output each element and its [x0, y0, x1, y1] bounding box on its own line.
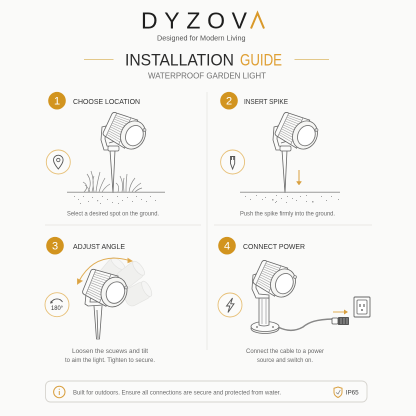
logo: DYZOV	[141, 8, 248, 34]
arrow: down	[296, 170, 302, 185]
arrow: right	[333, 310, 348, 314]
icon: map pin	[46, 150, 70, 174]
panel: step 1 choose location	[46, 92, 165, 218]
step 3 badge: 3	[52, 241, 58, 253]
step 4 caption: Connect the cable to a power	[246, 348, 325, 355]
icon: info	[54, 386, 65, 398]
title: GUIDE	[240, 50, 282, 70]
grass	[83, 171, 142, 192]
icon: shield	[334, 387, 342, 398]
step 2 badge: 2	[226, 96, 232, 108]
arrow: rotation arc	[78, 258, 132, 284]
lamp illustration	[81, 266, 132, 339]
panel: step 3 adjust angle: to aim the light. Tighten to secure.	[65, 357, 155, 364]
subtitle: WATERPROOF GARDEN LIGHT	[148, 72, 266, 80]
base	[251, 298, 279, 334]
lamp illustration	[251, 257, 300, 302]
step 2 caption: Push the spike firmly into the ground.	[240, 210, 335, 218]
ground	[67, 192, 165, 204]
title	[84, 50, 329, 70]
ghost lamp positions	[96, 255, 154, 308]
icon: wall outlet	[354, 297, 370, 317]
ground	[240, 192, 340, 203]
lamp illustration	[101, 109, 150, 193]
callout: footer note	[46, 381, 367, 402]
panel: step 4 connect power: source and switch on.	[257, 357, 313, 364]
icon: 180 degrees: 180°	[51, 306, 64, 312]
step 4 heading: CONNECT POWER	[243, 242, 305, 251]
lamp illustration	[273, 109, 322, 193]
step 3 caption: Loosen the scuews and tilt	[72, 348, 148, 355]
cable	[278, 319, 333, 330]
step 1 badge: 1	[54, 96, 60, 108]
dividers	[45, 92, 372, 350]
footer text: Built for outdoors. Ensure all connections are secure and protected from water.	[73, 390, 281, 396]
tagline: Designed for Modern Living	[157, 34, 246, 42]
panel: step 4 connect power	[218, 237, 370, 364]
connector	[332, 317, 349, 325]
step 3 heading: ADJUST ANGLE	[73, 242, 125, 251]
panel: step 2 insert spike	[220, 92, 340, 218]
panel: step 3 adjust angle	[45, 237, 155, 364]
IP65 label: IP65	[346, 390, 359, 396]
step 2 heading: INSERT SPIKE	[244, 97, 288, 106]
icon: lightning bolt	[218, 293, 242, 317]
step 1 heading: CHOOSE LOCATION	[73, 97, 140, 106]
icon: spike	[221, 150, 245, 174]
step 1 caption: Select a desired spot on the ground.	[67, 210, 159, 218]
step 4 badge: 4	[224, 241, 230, 253]
step 4 badge	[218, 237, 236, 254]
title: INSTALLATION	[125, 50, 234, 70]
